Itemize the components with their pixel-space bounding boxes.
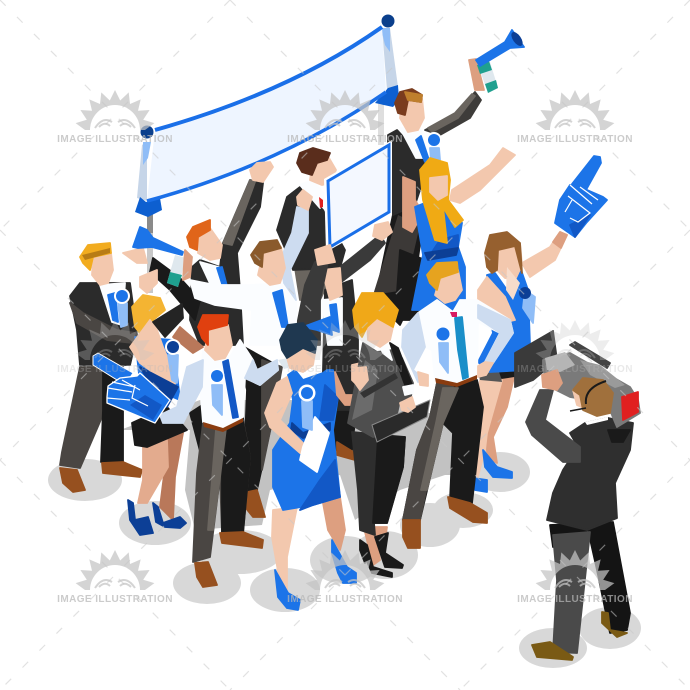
man with raised arms behind the crowd bbox=[297, 222, 392, 460]
man with red hair, white shirt and blue tie bbox=[160, 315, 288, 587]
watermark row 1: IMAGE ILLUSTRATION bbox=[517, 134, 633, 145]
man with orange hair and horn bbox=[123, 162, 273, 345]
watermark row 2 bbox=[57, 320, 633, 375]
watermark row 3: IMAGE ILLUSTRATION bbox=[287, 594, 403, 605]
watermark row 3: IMAGE ILLUSTRATION bbox=[517, 594, 633, 605]
blue foam pointing hand, right bbox=[555, 156, 607, 237]
blue foam pointing hand, left bbox=[93, 353, 178, 423]
woman in blue dress with yellow hair, pointing bbox=[395, 148, 515, 320]
watermark row 1: IMAGE ILLUSTRATION bbox=[287, 134, 403, 145]
watermark: sun logos and labels bbox=[57, 90, 633, 605]
man in white shirt with teal tie, front bbox=[402, 262, 513, 548]
watermark row 2: IMAGE ILLUSTRATION bbox=[57, 364, 173, 375]
banner with two poles bbox=[135, 14, 399, 293]
ground shadows bbox=[48, 400, 641, 668]
woman in blue skirt with foam finger, right bbox=[473, 232, 567, 492]
video camera bbox=[515, 331, 640, 427]
man with yellow hair, far left bbox=[60, 243, 157, 492]
man with air horn, top right bbox=[373, 30, 525, 325]
woman in blue dress with dark hair and paper bbox=[265, 317, 369, 610]
head with headset bbox=[570, 378, 613, 416]
jacket and arm bbox=[526, 390, 633, 530]
man in dark suit, centre back bbox=[277, 148, 345, 300]
placard sign bbox=[324, 140, 392, 252]
man in white shirt, raising arm bbox=[190, 190, 312, 517]
woman with ponytail in grey suit and clipboard bbox=[348, 293, 430, 577]
watermark row 2: IMAGE ILLUSTRATION bbox=[287, 364, 403, 375]
watermark row 3 bbox=[57, 550, 633, 605]
watermark row 1 bbox=[57, 90, 633, 145]
blonde woman taking a phone photo bbox=[128, 295, 203, 535]
watermark row 2: IMAGE ILLUSTRATION bbox=[517, 364, 633, 375]
cameraman with video camera bbox=[515, 331, 640, 660]
watermark row 1: IMAGE ILLUSTRATION bbox=[57, 134, 173, 145]
watermark row 3: IMAGE ILLUSTRATION bbox=[57, 594, 173, 605]
trousers and shoes bbox=[532, 522, 630, 660]
